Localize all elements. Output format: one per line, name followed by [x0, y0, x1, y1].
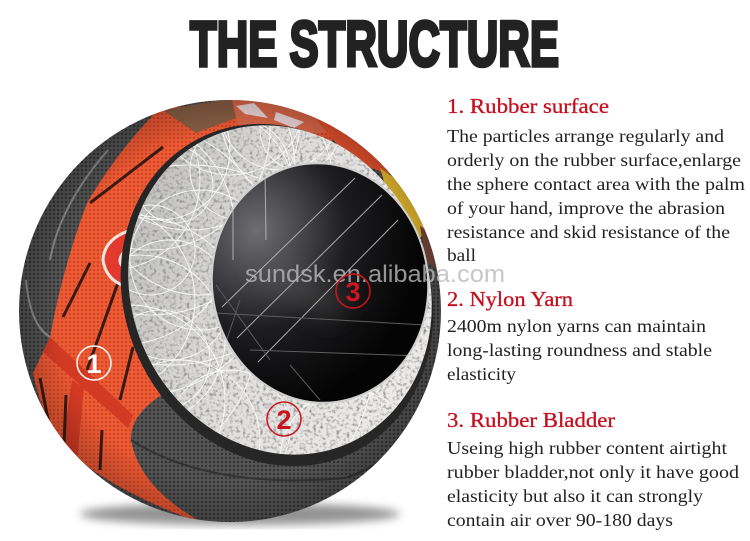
marker 2: 2: [276, 405, 292, 435]
heading 2: 2. Nylon Yarn: [447, 287, 574, 311]
heading 1: 1. Rubber surface: [447, 94, 609, 118]
orange top right patch: [314, 118, 390, 175]
text block 3: Useing high rubber content airtight: [447, 438, 727, 458]
text block 1: the sphere contact area with the palm: [447, 174, 745, 194]
red seam band: [43, 337, 133, 470]
ball outer surface: [15, 95, 445, 530]
text block 3: elasticity but also it can strongly: [447, 486, 703, 506]
marker 2: [267, 402, 301, 436]
orange rubber panel: [33, 95, 345, 525]
text block 1: The particles arrange regularly and: [447, 126, 724, 146]
text block 1: orderly on the rubber surface,enlarge: [447, 150, 741, 170]
text block 2: long-lasting roundness and stable: [447, 340, 712, 360]
marker 3: 3: [345, 277, 361, 307]
nylon yarn layer: [128, 125, 432, 455]
marker 3: [336, 274, 370, 308]
text block 2: [447, 316, 712, 384]
text block 2: 2400m nylon yarns can maintain: [447, 316, 706, 336]
text block 1: ball: [447, 245, 476, 265]
text block 1: resistance and skid resistance of the: [447, 222, 730, 242]
text block 3: [447, 438, 739, 530]
brown right patch: [420, 226, 437, 268]
rubber bladder: [210, 162, 430, 404]
watermark: sundsk.en.alibaba.com: [245, 261, 505, 288]
dark ring of cut-out: [65, 72, 489, 518]
upper-left seam: [26, 150, 108, 337]
text block 3: contain air over 90-180 days: [447, 510, 673, 530]
logo fragment: [103, 231, 128, 286]
cartoon base patch: [232, 100, 340, 135]
basketball illustration: [19, 100, 441, 522]
cartoon white and pink marks: [236, 103, 304, 128]
dark stripes: [40, 147, 163, 470]
text block 1: of your hand, improve the abrasion: [447, 198, 725, 218]
brown cartoon patch: [163, 98, 236, 133]
text block 3: rubber bladder,not only it have good: [447, 462, 739, 482]
title: THE STRUCTURE: [190, 8, 559, 80]
marker 1: 1: [86, 349, 102, 379]
marker 1: [77, 346, 111, 380]
text block 1: [447, 126, 745, 265]
ball shadow: [80, 503, 400, 525]
section 1: rubber surface: [447, 94, 745, 265]
lower dark seam: [130, 439, 379, 482]
heading 3: 3. Rubber Bladder: [447, 408, 615, 432]
text block 2: elasticity: [447, 364, 516, 384]
yellow patch: [380, 168, 428, 238]
section 3: rubber bladder: [447, 408, 739, 530]
section 2: nylon yarn: [447, 287, 712, 384]
